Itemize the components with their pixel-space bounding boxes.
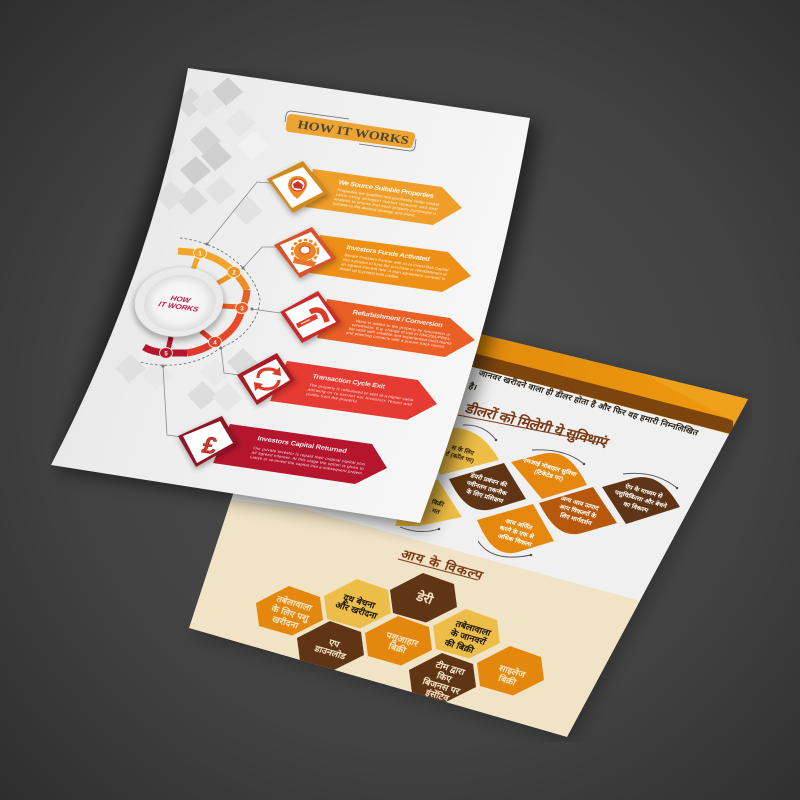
step 2 ribbon: an agreed interest rate. A loan agreement contract is — [341, 262, 446, 281]
leaf labels: अधिक विकल्प — [497, 532, 533, 549]
hexagon labels: डाउनलोड — [312, 642, 349, 662]
step 4 ribbon: Transaction Cycle Exit — [311, 374, 387, 390]
benefit leaf: brown right — [602, 477, 680, 524]
hexagon labels: के लिए पशु — [269, 602, 312, 624]
page paper — [51, 68, 530, 523]
leaf labels: पशुचिकित्सा और बेचने — [613, 488, 668, 510]
hexagon labels: बिक्री — [386, 640, 409, 655]
curved arrows around leaves — [400, 425, 678, 557]
intro paragraph: है। — [466, 381, 479, 392]
leaf labels: (टिकेटेड पर) — [533, 468, 564, 483]
benefit leaf: orange lower — [477, 504, 554, 553]
icon: pound sign: £ — [199, 432, 220, 460]
leaf labels: र्ट (कॉल पर) — [443, 450, 475, 465]
background diamonds — [115, 77, 269, 412]
step 2 ribbon: Investors Funds Activated — [345, 245, 431, 263]
centre disc — [128, 262, 230, 347]
heading: dealer benefits: डीलरों को मिलेगी ये सुविधाएं — [462, 400, 612, 452]
hexagon labels: दूध बेचना — [340, 591, 378, 611]
connector lines — [162, 182, 280, 437]
hexagon labels — [269, 589, 529, 703]
leaf labels: का विकल्प — [621, 500, 650, 514]
leaf labels: मत — [430, 507, 441, 516]
hexagon labels: बिजनस पर — [420, 675, 463, 696]
step 1 ribbon: We Source Suitable Properties — [337, 180, 435, 200]
centre disc: HOW — [169, 294, 192, 305]
step 1 ribbon: suitable to the desired strategy and intent. — [332, 201, 417, 218]
benefit leaf: yellow top — [438, 428, 499, 475]
step 1 ribbon: Properties are qualified and purchased under market — [337, 188, 441, 207]
step nodes: 1 — [198, 252, 202, 258]
hexagon labels: डेरी — [413, 589, 436, 607]
step 1 ribbon: value using stringent market research and deal — [335, 192, 439, 211]
hexagon labels: तबेलावाला — [274, 593, 314, 613]
hexagon labels: खरीदना — [269, 613, 301, 631]
leaf labels: के लिए प्रशिक्षण — [464, 487, 505, 505]
leaf labels: लिए मार्गदर्शन — [558, 511, 593, 527]
spokes — [168, 256, 240, 350]
section title badge: HOW IT WORKS — [296, 118, 410, 147]
step 2 ribbon: Secure Investors Partner with us to invest Bolt Capital — [344, 253, 449, 272]
back page shadow — [190, 340, 752, 742]
step 3 ribbon: conversion. E.g. change of use to HMO/SA/PBSA. — [351, 322, 452, 341]
step 2 ribbon — [310, 235, 471, 292]
step 1 ribbon: analysis to ensure that each property purchased is — [334, 197, 437, 216]
leaf labels: आय अर्जित — [504, 517, 534, 532]
icon: pound sign — [178, 416, 240, 470]
leaf labels: डेयरी प्रबंधन की — [468, 471, 509, 489]
step ring — [144, 251, 247, 353]
leaf labels: स के लिए — [449, 443, 476, 457]
icon: location pin — [267, 161, 330, 216]
step 3 ribbon: Refurbishment / Conversion — [351, 310, 444, 329]
step 5 ribbon: Investors Capital Returned — [256, 436, 348, 455]
icon: gear with coin — [274, 227, 338, 281]
page paper — [189, 290, 748, 737]
section title badge — [285, 111, 416, 151]
leaf labels: एमआई मोबाइल सुविधा — [521, 456, 578, 478]
step 5 ribbon: Liaise or re-invest the capital into a subsequent project. — [250, 455, 364, 475]
top orange band — [472, 334, 748, 434]
step 4 ribbon — [270, 361, 437, 420]
leaf labels: करने के एक से — [497, 524, 536, 541]
leaf labels: आय विकल्पों के — [558, 503, 599, 520]
hexagon labels: एप — [326, 637, 342, 649]
icon: hammer — [280, 291, 343, 346]
hexagon grid — [256, 573, 544, 702]
step nodes: 4 — [213, 340, 217, 346]
step 4 ribbon: The property is refinanced or sold at a higher value — [309, 383, 415, 402]
step nodes: 2 — [232, 270, 236, 276]
step 4 ribbon: profits from the property. — [306, 392, 359, 403]
front page shadow — [55, 72, 540, 530]
leaf labels — [429, 443, 668, 549]
leaf labels: बिक्री — [429, 498, 445, 509]
icon: refresh arrows — [237, 353, 297, 407]
step 1 ribbon — [305, 169, 462, 225]
cream lower section — [189, 500, 644, 737]
step 3 ribbon — [317, 299, 475, 357]
centre disc: IT WORKS — [157, 300, 200, 314]
hexagon labels: किए — [434, 670, 455, 684]
hexagon labels: साइलेज — [496, 662, 529, 680]
benefit leaf: yellow lower — [395, 480, 462, 526]
step nodes: 5 — [164, 352, 168, 358]
hexagon labels: बिक्री — [496, 672, 519, 687]
hexagon labels: पशुआहार — [383, 630, 421, 650]
step 5 ribbon: Our private investor is repaid their original capital plus — [253, 446, 366, 466]
benefit leaf: brown middle — [449, 463, 526, 510]
hexagon labels: के जानवरों — [448, 627, 489, 647]
benefit leaf: orange top — [511, 453, 587, 499]
hexagon labels: टीम द्वारा — [433, 659, 467, 677]
step 3 ribbon: and planning contacts with a proven track record. — [345, 330, 446, 349]
leaf labels: नवीनतम तकनीक — [464, 479, 509, 498]
hexagon labels: की बिक्री — [442, 637, 476, 655]
back page: Hindi brochure — [189, 290, 748, 737]
step nodes: 3 — [240, 306, 244, 312]
intro paragraph: जानवर खरीदने वाला ही डीलर होता है और फिर वह हमारी निम्नलिखित — [476, 368, 701, 438]
step 4 ribbon: allowing us to extract our Investors Tenant and — [307, 387, 413, 407]
step 2 ribbon: drawn up to protect both parties. — [339, 266, 400, 279]
step nodes — [160, 248, 248, 358]
hexagon labels: इंसेंटिव — [423, 687, 452, 703]
heading: income options: आय के विकल्प — [399, 546, 486, 582]
step 5 ribbon — [213, 424, 387, 484]
step 2 ribbon: into a project to fund the purchase or refurbishment at — [342, 257, 449, 277]
dashed outer ring — [140, 238, 260, 365]
leaf labels: ऐप के माध्यम से — [623, 482, 664, 500]
hexagon labels: और खरीदना — [334, 599, 380, 621]
step 3 ribbon: Value is added to the property by renovation or — [355, 319, 452, 337]
step 3 ribbon: We work with credible and experienced build teams — [348, 326, 452, 346]
front page: how it works — [51, 68, 530, 523]
hexagon labels: तबेलावाला — [453, 618, 493, 638]
step 5 ribbon: all agreed interest. At this stage the option is given to — [251, 450, 365, 471]
leaf labels: अन्य आय उत्पाद — [559, 495, 600, 512]
benefit leaf: rust — [539, 487, 617, 534]
